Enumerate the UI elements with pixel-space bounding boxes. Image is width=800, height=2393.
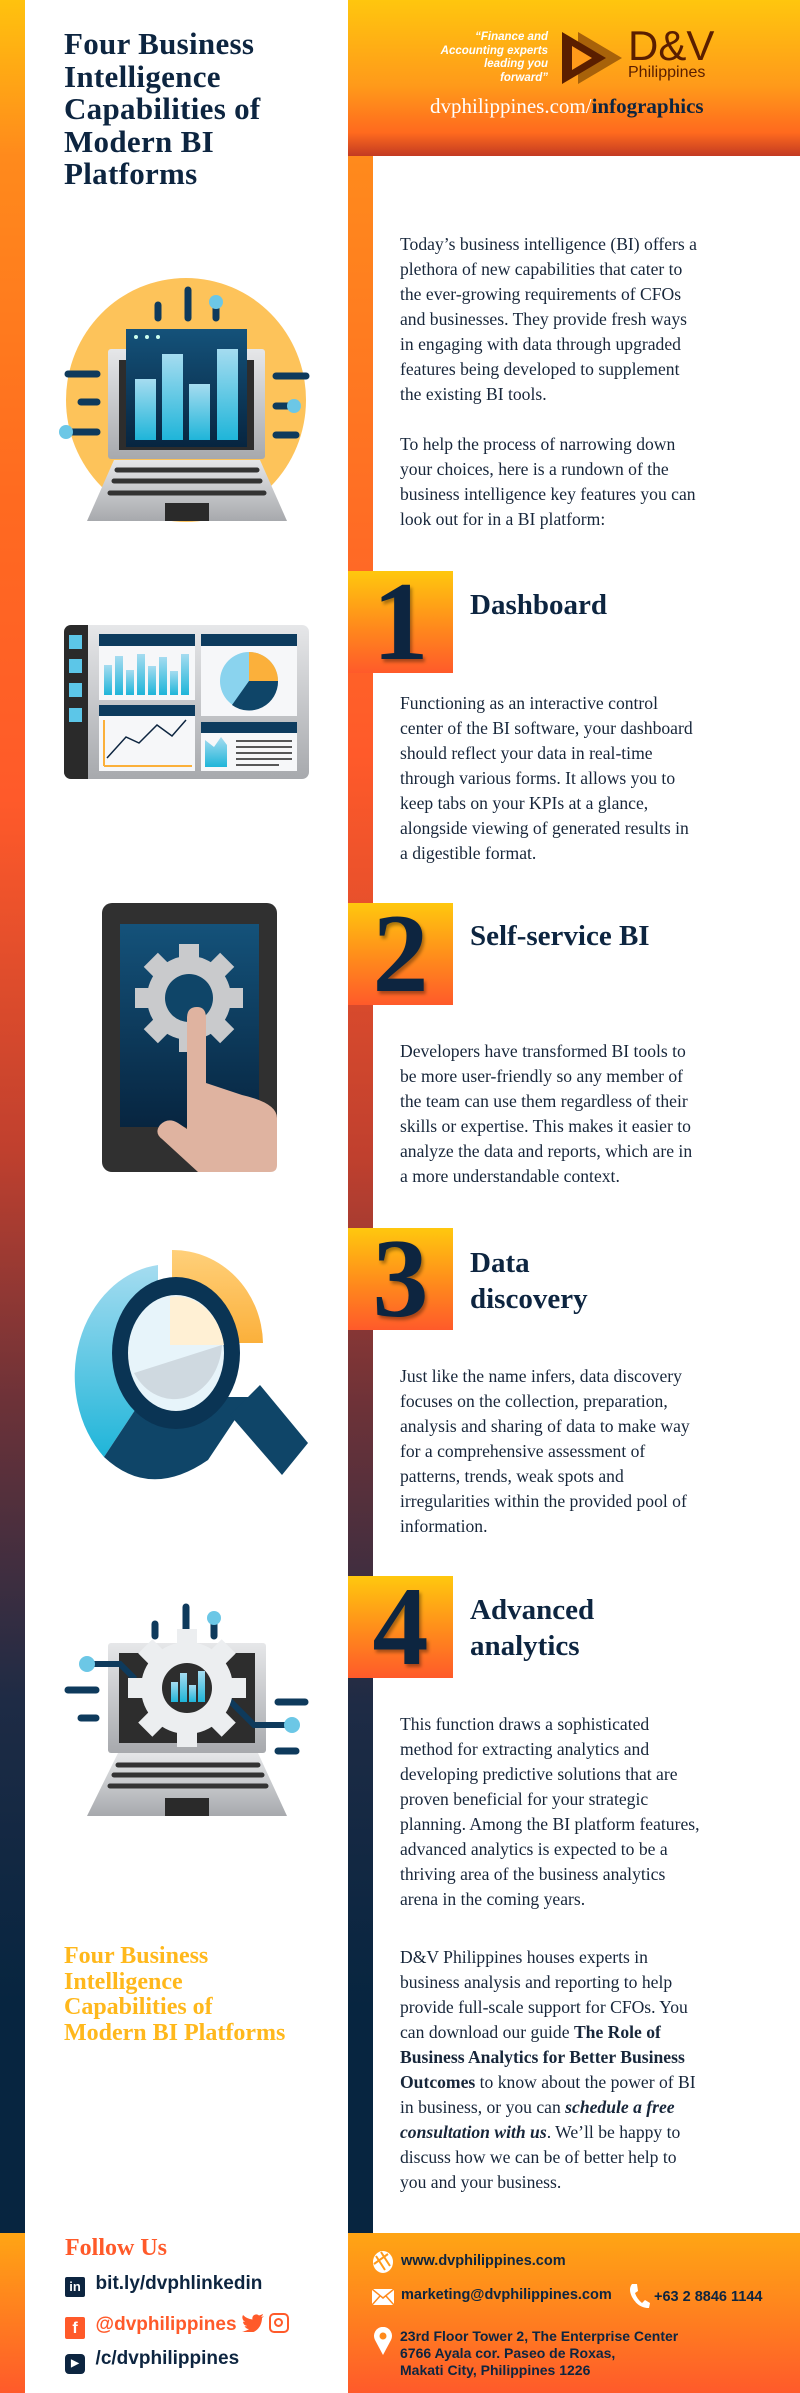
- text: data discovery: irregularities within the provided pool of: [400, 1491, 687, 1511]
- orange repeated title: [64, 1943, 285, 2046]
- intro text: features being developed to supplement: [400, 359, 679, 379]
- facebook: f: [72, 2320, 78, 2337]
- text: dashboard: alongside viewing of generated results in: [400, 818, 689, 838]
- icon: laptop with gear: [64, 1604, 308, 1816]
- logo text: D&V: [628, 22, 714, 69]
- text: data discovery: for a comprehensive assessment of: [400, 1441, 645, 1461]
- footer right contacts: +63 2 8846 1144: [654, 2289, 762, 2305]
- intro text: To help the process of narrowing down: [400, 434, 675, 454]
- orange repeated title: Four Business: [64, 1943, 208, 1969]
- closing paragraph: consultation with us. We’ll be happy to: [400, 2122, 680, 2142]
- intro text: look out for in a BI platform:: [400, 509, 605, 529]
- closing paragraph: Outcomes to know about the power of BI: [400, 2072, 696, 2092]
- heading: Self-service BI: Self-service BI: [470, 920, 650, 952]
- orange repeated title: Intelligence: [64, 1968, 183, 1994]
- footer right contacts: www.dvphilippines.com: [401, 2253, 566, 2269]
- title: Capabilities of: [64, 91, 261, 126]
- youtube: /c/dvphilippines: [96, 2348, 239, 2369]
- text: self-service: [400, 1041, 692, 1186]
- title: Platforms: [64, 156, 198, 191]
- icon: globe: [373, 2251, 393, 2273]
- icon: tablet with gear: [102, 903, 277, 1172]
- tagline: Accounting experts: [441, 44, 548, 56]
- closing paragraph: you and your business.: [400, 2172, 561, 2192]
- header banner: [348, 0, 800, 156]
- heading: Data discovery: discovery: [470, 1283, 588, 1315]
- text: advanced analytics: This function draws a sophisticated: [400, 1714, 649, 1734]
- closing paragraph: Business Analytics for Better Business: [400, 2047, 685, 2067]
- intro text: plethora of new capabilities that cater to: [400, 259, 682, 279]
- text: dashboard: through various forms. It allows you to: [400, 768, 675, 788]
- footer left social: [65, 2235, 289, 2374]
- icon: pin: [374, 2327, 392, 2355]
- linkedin: in: [69, 2279, 81, 2294]
- title: Modern BI: [64, 124, 214, 158]
- closing paragraph: business analysis and reporting to help: [400, 1972, 672, 1992]
- text: data discovery: [400, 1366, 690, 1536]
- text: self-service: analyze the data and reports, which are in: [400, 1141, 692, 1161]
- intro text: business intelligence key features you can: [400, 484, 696, 504]
- orange repeated title: Modern BI Platforms: [64, 2020, 285, 2046]
- heading: Data discovery: Data: [470, 1247, 530, 1279]
- footer right contacts: marketing@dvphilippines.com: [401, 2287, 612, 2303]
- tagline: “Finance and: [475, 31, 548, 43]
- text: data discovery: analysis and sharing of data to make way: [400, 1416, 690, 1436]
- text: self-service: a more understandable context.: [400, 1166, 620, 1186]
- closing paragraph: [400, 1947, 696, 2192]
- title: [64, 26, 261, 191]
- text: advanced analytics: advanced analytics is expected to be a: [400, 1839, 668, 1859]
- icon: mail: [372, 2289, 394, 2305]
- number 2: 2: [372, 892, 428, 1016]
- closing paragraph: in business, or you can schedule a free: [400, 2097, 675, 2117]
- facebook: [65, 2313, 289, 2339]
- intro text: [400, 234, 697, 529]
- heading: Follow Us: Follow Us: [65, 2235, 167, 2261]
- number 1: [348, 571, 453, 673]
- number 4: [348, 1576, 453, 1678]
- logo mark: [562, 32, 622, 84]
- footer right contacts: [348, 2233, 800, 2393]
- heading: Dashboard: Dashboard: [470, 589, 607, 621]
- closing paragraph: provide full-scale support for CFOs. You: [400, 1997, 688, 2017]
- closing paragraph: can download our guide The Role of: [400, 2022, 661, 2042]
- intro text: and businesses. They provide fresh ways: [400, 309, 687, 329]
- text: dashboard: a digestible format.: [400, 843, 536, 863]
- text: advanced analytics: developing predictive solutions that are: [400, 1764, 678, 1784]
- tagline: forward”: [500, 72, 548, 84]
- facebook: @dvphilippines: [96, 2314, 237, 2335]
- footer right contacts: 23rd Floor Tower 2, The Enterprise Center: [400, 2328, 678, 2344]
- text: advanced analytics: proven beneficial for your strategic: [400, 1789, 648, 1809]
- text: self-service: the team can use them regardless of their: [400, 1091, 688, 1111]
- text: advanced analytics: arena in the coming years.: [400, 1889, 585, 1909]
- heading: Data discovery: [470, 1247, 588, 1315]
- footer right contacts: 6766 Ayala cor. Paseo de Roxas,: [400, 2345, 615, 2361]
- left strip: [0, 0, 25, 2393]
- icon: magnifier with pie: [74, 1250, 308, 1480]
- text: self-service: Developers have transformed BI tools to: [400, 1041, 686, 1061]
- intro text: the ever-growing requirements of CFOs: [400, 284, 681, 304]
- heading: Advanced analytics: [470, 1594, 594, 1662]
- text: self-service: skills or expertise. This makes it easier to: [400, 1116, 691, 1136]
- text: advanced analytics: thriving area of the business analytics: [400, 1864, 665, 1884]
- header banner: Philippines: [628, 64, 705, 81]
- text: data discovery: Just like the name infers, data discovery: [400, 1366, 682, 1386]
- right strip: [348, 156, 373, 2233]
- intro text: the existing BI tools.: [400, 384, 547, 404]
- intro text: Today’s business intelligence (BI) offers a: [400, 234, 697, 254]
- text: dashboard: should reflect your data in real-time: [400, 743, 653, 763]
- text: dashboard: [400, 693, 693, 863]
- youtube: [65, 2348, 239, 2374]
- text: dashboard: keep tabs on your KPIs at a glance,: [400, 793, 648, 813]
- orange repeated title: Capabilities of: [64, 1994, 213, 2020]
- tagline: [440, 31, 548, 84]
- text: advanced analytics: [400, 1714, 700, 1909]
- youtube: ▶: [71, 2358, 79, 2369]
- number 3: [348, 1228, 453, 1330]
- text: data discovery: information.: [400, 1516, 487, 1536]
- heading: Advanced analytics: analytics: [470, 1630, 580, 1662]
- text: dashboard: center of the BI software, your dashboard: [400, 718, 693, 738]
- text: advanced analytics: method for extracting analytics and: [400, 1739, 649, 1759]
- footer right contacts: Makati City, Philippines 1226: [400, 2362, 590, 2378]
- text: data discovery: patterns, trends, weak spots and: [400, 1466, 624, 1486]
- icon: dashboard: [64, 625, 309, 779]
- number 4: 4: [372, 1565, 428, 1689]
- tagline: leading you: [484, 58, 548, 70]
- title: Four Business: [64, 26, 254, 61]
- icon: hero laptop chart: [59, 278, 310, 522]
- intro text: your choices, here is a rundown of the: [400, 459, 669, 479]
- url: dvphilippines.com/infographics: [430, 94, 704, 118]
- linkedin: bit.ly/dvphlinkedin: [96, 2273, 262, 2294]
- number 3: 3: [372, 1217, 428, 1341]
- closing paragraph: D&V Philippines houses experts in: [400, 1947, 648, 1967]
- number 1: 1: [372, 560, 428, 684]
- text: advanced analytics: planning. Among the BI platform features,: [400, 1814, 700, 1834]
- text: data discovery: focuses on the collection, preparation,: [400, 1391, 668, 1411]
- text: dashboard: Functioning as an interactive control: [400, 693, 658, 713]
- number 2: [348, 903, 453, 1005]
- closing paragraph: discuss how we can be of better help to: [400, 2147, 677, 2167]
- intro text: in engaging with data through upgraded: [400, 334, 681, 354]
- icon: phone: [630, 2284, 650, 2308]
- heading: Advanced analytics: Advanced: [470, 1594, 594, 1626]
- text: self-service: be more user-friendly so any member of: [400, 1066, 683, 1086]
- title: Intelligence: [64, 58, 221, 94]
